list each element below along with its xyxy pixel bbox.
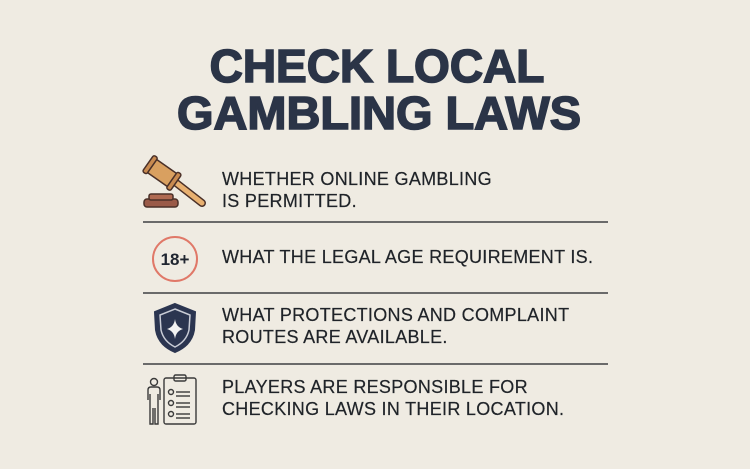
text: item 4: PLAYERS ARE RESPONSIBLE FOR bbox=[222, 377, 528, 397]
icon: person with checklist bbox=[147, 374, 197, 425]
title: GAMBLING LAWS bbox=[177, 87, 581, 139]
icon: 18+ bbox=[152, 236, 198, 282]
text: item 3 bbox=[222, 305, 569, 347]
icon: 18+: 18+ bbox=[161, 250, 189, 269]
text: item 2: WHAT THE LEGAL AGE REQUIREMENT IS. bbox=[222, 247, 593, 267]
title bbox=[177, 40, 581, 139]
text: item 1: WHETHER ONLINE GAMBLING bbox=[222, 169, 492, 189]
text: item 3: ROUTES ARE AVAILABLE. bbox=[222, 327, 448, 347]
text: item 1: IS PERMITTED. bbox=[222, 191, 357, 211]
title: CHECK LOCAL bbox=[210, 40, 544, 92]
text: item 3: WHAT PROTECTIONS AND COMPLAINT bbox=[222, 305, 569, 325]
icon: gavel bbox=[142, 155, 206, 208]
text: item 4 bbox=[222, 377, 564, 419]
text: item 4: CHECKING LAWS IN THEIR LOCATION. bbox=[222, 399, 564, 419]
icon: shield bbox=[154, 302, 196, 354]
text: item 1 bbox=[222, 169, 492, 211]
